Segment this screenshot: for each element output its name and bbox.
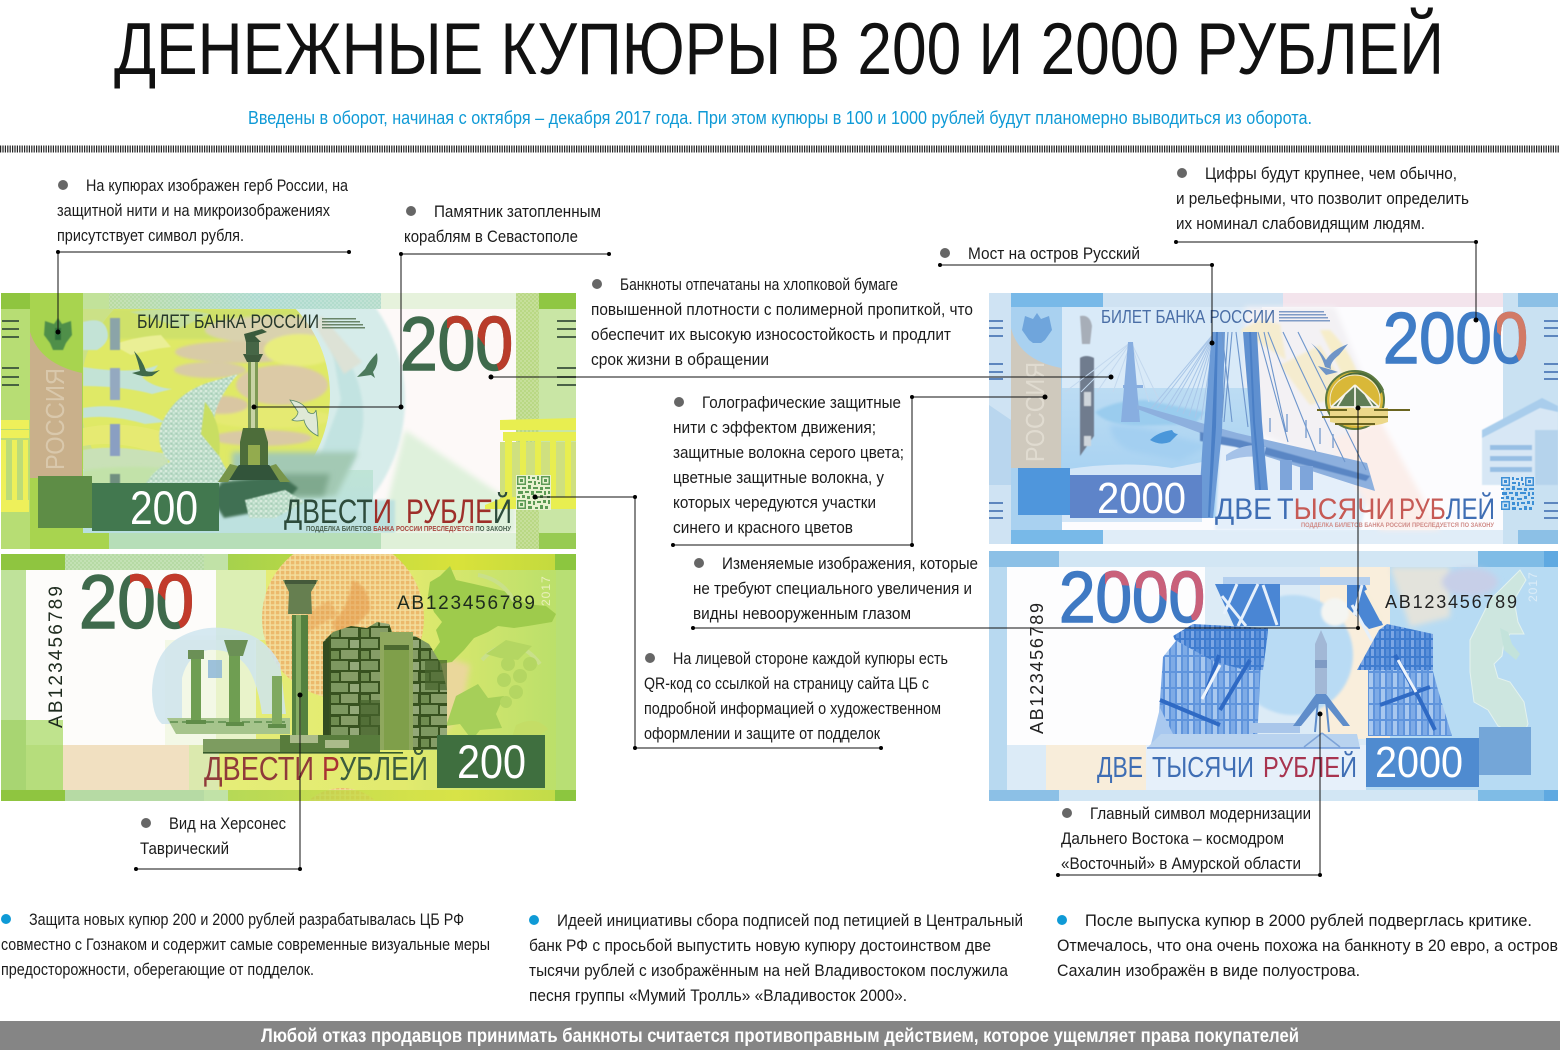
pale blue clouds [83, 309, 210, 424]
serial number vertical: АВ123456789 [46, 586, 67, 728]
right upper truss [1347, 585, 1383, 629]
near pylons [1198, 332, 1225, 518]
note: larger embossed digits [1176, 165, 1469, 233]
pale cloud [1321, 598, 1349, 626]
sky and water [1062, 307, 1440, 530]
grape leaves [447, 640, 537, 735]
denomination in words [204, 750, 428, 787]
banknote: 2000 rubles back [989, 551, 1558, 801]
note: Chersonesus [140, 815, 286, 858]
year: 2017 [539, 575, 553, 606]
text block: protection: Защита новых купюр 200 и 2000 рублей разрабатывалась ЦБ РФ [29, 911, 464, 929]
note: larger embossed digits: и рельефными, что позволит определить [1176, 190, 1469, 208]
note: Vostochny cosmodrome: «Восточный» в Амурской области [1061, 855, 1301, 873]
bank name: БИЛЕТ БАНКА РОССИИ [137, 312, 319, 333]
serial number horizontal: АВ123456789 [1385, 592, 1517, 612]
monument to the sunken ships [218, 329, 290, 482]
blue arch [152, 628, 286, 724]
text block: petition: тысячи рублей с изображённым на ней Владивостоком послужила [529, 962, 1009, 980]
text block: petition [529, 912, 1023, 1005]
note: holographic threads [673, 394, 904, 537]
denomination in words: РУБЛЕЙ [1399, 492, 1495, 526]
big denomination 200 [82, 574, 192, 630]
note: holographic threads: цветные защитные волокна, у [673, 469, 885, 487]
note: Russky island bridge: Мост на остров Русский [968, 245, 1140, 263]
icon: coat of arms [1022, 313, 1052, 343]
note: coat of arms and ruble symbol [57, 177, 349, 245]
QR code [516, 475, 551, 510]
left platform [1173, 624, 1268, 670]
sky circle behind rocket [1233, 595, 1353, 715]
callout leader lines [56, 240, 1478, 877]
note: monument: Памятник затопленным [434, 203, 601, 221]
banknote: 200 rubles front [1, 293, 576, 549]
launch pad [1147, 723, 1360, 748]
note: QR code [644, 650, 948, 743]
big denomination 2000: 2000 [1383, 299, 1528, 379]
note: variable images: не требуют специального увеличения и [693, 580, 972, 598]
value panels [1018, 468, 1202, 523]
note: Vostochny cosmodrome: Дальнего Востока – космодром [1061, 830, 1284, 848]
mosaic circle [262, 554, 424, 801]
watermark panel [30, 332, 82, 478]
note: cotton paper [591, 276, 973, 369]
denomination in words: ДВЕ [1097, 752, 1143, 784]
text block: protection [1, 911, 490, 979]
note: larger embossed digits: Цифры будут крупнее, чем обычно, [1205, 165, 1457, 183]
denomination in words: ТЫСЯЧИ [1277, 493, 1395, 526]
left upper truss [1215, 584, 1280, 626]
text block: criticism: Сахалин изображён в виде полуострова. [1057, 962, 1360, 980]
big denomination 2000: 2000 [1383, 299, 1528, 379]
note: Chersonesus: Вид на Херсонес [169, 815, 286, 833]
optically variable emblem [1317, 371, 1410, 429]
serial number horizontal: АВ123456789 [397, 593, 535, 614]
text block: protection: предосторожности, оберегающие от подделок. [1, 961, 314, 979]
note: QR code: На лицевой стороне каждой купюры есть [673, 650, 948, 668]
right body [1368, 660, 1452, 736]
dark value panels: 200 [130, 481, 198, 534]
note: Vostochny cosmodrome [1061, 805, 1311, 873]
note: variable images: видны невооруженным глазом [693, 605, 911, 623]
note: cotton paper: Банкноты отпечатаны на хлопковой бумаге [620, 276, 898, 294]
denomination in words [284, 493, 512, 531]
text block: criticism: Отмечалось, что она очень похожа на банкноту в 20 евро, а остров [1057, 937, 1558, 955]
note: larger embossed digits: их номинал слабовидящим людям. [1176, 215, 1425, 233]
note: monument: кораблям в Севастополе [404, 228, 578, 246]
denomination in words: РУБЛЕЙ [322, 750, 428, 787]
note: QR code: оформлении и защите от подделок [644, 725, 881, 743]
note: coat of arms and ruble symbol: На купюрах изображен герб России, на [86, 177, 349, 195]
subtitle: Введены в оборот, начиная с октября – декабря 2017 года. При этом купюры в 100 и 1000 рублей будут планомерно выводиться из оборота. [248, 108, 1312, 128]
big denomination 2000: 2000 [1059, 558, 1205, 638]
text block: petition: песня группы «Мумий Тролль» «Владивосток 2000». [529, 987, 907, 1005]
right building [1482, 398, 1558, 485]
ancient column [283, 580, 318, 736]
text block: petition: банк РФ с просьбой выпустить новую купюру достоинством две [529, 937, 991, 955]
big denomination 200: 200 [79, 560, 194, 645]
banknote: 200 rubles back [1, 554, 576, 801]
rocket [1293, 630, 1350, 732]
sea [232, 452, 358, 500]
warning line: ПОДДЕЛКА БИЛЕТОВ БАНКА РОССИИ ПРЕСЛЕДУЕТСЯ ПО ЗАКОНУ [306, 526, 512, 533]
dark value panels [38, 476, 219, 534]
note: holographic threads: нити с эффектом движения; [673, 419, 876, 437]
seagulls [132, 351, 378, 436]
Crimea map [428, 566, 556, 664]
edge marks [2, 321, 576, 385]
text block: petition: Идеей инициативы сбора подписей под петицией в Центральный [557, 912, 1023, 930]
note: cotton paper: повышенной плотности с полимерной пропиткой, что [591, 301, 973, 319]
yellow buildings [1, 418, 576, 512]
text block: protection: совместно с Гознаком и содержит самые современные визуальные меры [1, 936, 490, 954]
note: cotton paper: срок жизни в обращении [591, 351, 769, 369]
watermark panel: РОССИЯ [1020, 362, 1050, 462]
note: coat of arms and ruble symbol: защитной нити и на микроизображениях [57, 202, 331, 220]
note: Chersonesus: Таврический [140, 840, 229, 858]
big denomination 200 [402, 316, 512, 372]
wave [146, 374, 238, 486]
year: 2017 [1526, 571, 1540, 602]
seagull [1311, 343, 1348, 375]
Far East map [1442, 568, 1528, 738]
banknote: 2000 rubles front [989, 293, 1558, 544]
footer banner [0, 1021, 1560, 1050]
right platform [1357, 624, 1433, 670]
note: holographic threads: Голографические защитные [702, 394, 901, 412]
security thread [1080, 316, 1094, 456]
left building [989, 405, 1011, 485]
left body [1157, 632, 1261, 742]
big denomination 200: 200 [79, 560, 194, 645]
bridge [1065, 332, 1375, 518]
note: holographic threads: синего и красного цветов [673, 519, 853, 537]
QR code [1501, 477, 1534, 510]
central field [83, 309, 516, 533]
serial number vertical: АВ123456789 [1027, 603, 1047, 734]
value panel: 200 [457, 735, 526, 788]
edge marks [989, 321, 1558, 518]
launch gantry towers [1150, 577, 1452, 748]
note: cotton paper: обеспечит их высокую износостойкость и продлит [591, 326, 951, 344]
note: holographic threads: защитные волокна серого цвета; [673, 444, 904, 462]
peach background patch [440, 655, 470, 740]
denomination in words: ДВЕ [1215, 493, 1272, 526]
denomination in words: РУБЛЕЙ [406, 493, 512, 531]
footer banner: Любой отказ продавцов принимать банкноты считается противоправным действием, которое ущемляет права покупателей [261, 1026, 1299, 1047]
big denomination 2000: 2000 [1059, 558, 1205, 638]
note: variable images [693, 555, 978, 623]
denomination in words: ТЫСЯЧИ [1152, 752, 1254, 784]
warning line: ПОДДЕЛКА БИЛЕТОВ БАНКА РОССИИ ПРЕСЛЕДУЕТСЯ ПО ЗАКОНУ [1301, 522, 1495, 529]
note: QR code: подробной информацией о художественном [644, 700, 941, 718]
denomination in words: ДВЕСТИ [284, 493, 392, 531]
denomination in words: ДВЕСТИ [204, 750, 314, 787]
value panels [1366, 727, 1531, 787]
ruined wall [203, 622, 447, 754]
text block: criticism: После выпуска купюр в 2000 рублей подверглась критике. [1085, 912, 1532, 930]
holographic thread [110, 318, 120, 504]
denomination in words: РУБЛЕЙ [1263, 750, 1357, 784]
small columns [167, 640, 290, 734]
icon: coat of arms [44, 318, 72, 350]
big denomination 200: 200 [400, 302, 513, 387]
value panels: 2000 [1097, 474, 1186, 523]
bank name: БИЛЕТ БАНКА РОССИИ [1101, 307, 1275, 327]
note: holographic threads: которых чередуются участки [673, 494, 876, 512]
far fan cables [1065, 342, 1161, 404]
denomination in words [1097, 750, 1357, 784]
note: coat of arms and ruble symbol: присутствует символ рубля. [57, 227, 244, 245]
note: QR code: QR-код со ссылкой на страницу сайта ЦБ с [644, 675, 929, 693]
watermark panel: РОССИЯ [40, 368, 70, 470]
big denomination 200: 200 [400, 302, 513, 387]
note: Vostochny cosmodrome: Главный символ модернизации [1090, 805, 1311, 823]
watermark panel [1011, 328, 1061, 468]
note: monument [404, 203, 601, 246]
rocks [219, 478, 298, 520]
value panels: 2000 [1375, 738, 1463, 787]
note: variable images: Изменяемые изображения, которые [722, 555, 978, 573]
text block: criticism [1057, 912, 1558, 980]
denomination in words [1215, 492, 1495, 526]
